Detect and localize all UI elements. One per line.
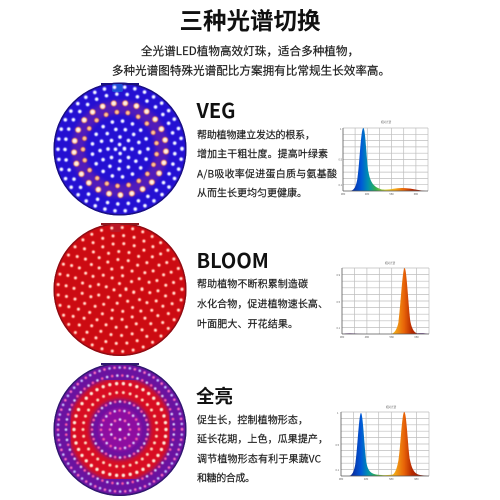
text block: BLOOM description: 叶面肥大、开花结果。 — [197, 316, 298, 330]
panel: VEG lamp disc — [54, 82, 186, 216]
chart: VEG spectrum: 580 — [389, 192, 394, 196]
chart: BLOOM spectrum: 0.1 — [336, 326, 341, 330]
text block: full-on description — [197, 412, 328, 484]
chart: full-on spectrum: 0.5 — [336, 443, 340, 447]
text block: BLOOM description — [197, 276, 328, 330]
chart: VEG spectrum — [338, 120, 428, 196]
chart: full-on spectrum: 380 — [339, 477, 344, 481]
chart: full-on spectrum — [336, 405, 429, 481]
text block: full-on description: 和糖的合成。 — [197, 470, 255, 484]
panel: full-on lamp disc — [54, 363, 186, 496]
chart: VEG spectrum: 0.1 — [338, 183, 343, 187]
chart: VEG spectrum: 480 — [365, 192, 370, 196]
chart: full-on spectrum: 1 — [337, 411, 339, 415]
text block: full-on description: 促生长，控制植物形态， — [197, 412, 308, 426]
chart: VEG spectrum: 相对光谱 — [381, 120, 392, 124]
text block: BLOOM description: 帮助植物不断积累制造碳 — [197, 276, 308, 290]
text block: full-on description: 延长花期，上色，瓜果提产， — [197, 430, 328, 446]
chart: VEG spectrum: 680 — [414, 192, 419, 196]
title: 三种光谱切换 — [180, 2, 321, 36]
chart: BLOOM spectrum: 480 — [365, 335, 370, 339]
chart: VEG spectrum: 380 — [341, 192, 346, 196]
text block: VEG description: A/B吸收率促进蛋白质与氨基酸 — [197, 166, 337, 180]
chart: BLOOM spectrum — [336, 261, 429, 339]
chart: VEG spectrum: 1 — [340, 127, 342, 131]
text block: VEG description — [197, 126, 337, 200]
chart: VEG spectrum: 0.5 — [338, 158, 343, 162]
heading: VEG: VEG — [196, 95, 236, 124]
intro text: 多种光谱图特殊光谱配比方案拥有比常规生长效率高。 — [112, 62, 390, 78]
chart: BLOOM spectrum: 580 — [390, 335, 394, 339]
intro text — [112, 43, 390, 78]
text block: BLOOM description: 水化合物，促进植物速长高、 — [197, 296, 328, 310]
text block: VEG description: 增加主干粗壮度。提高叶绿素 — [197, 146, 328, 160]
chart: full-on spectrum: 580 — [389, 477, 394, 481]
chart: BLOOM spectrum: 680 — [414, 335, 419, 339]
intro text: 全光谱LED植物高效灯珠，适合多种植物， — [141, 43, 359, 59]
chart: full-on spectrum: 0.1 — [336, 468, 340, 472]
heading: 全亮: 全亮 — [196, 383, 233, 409]
chart: full-on spectrum: 相对光谱 — [386, 405, 397, 409]
chart: BLOOM spectrum: 0.5 — [336, 300, 341, 304]
chart: full-on spectrum: 480 — [364, 477, 369, 481]
chart: BLOOM spectrum: 380 — [340, 335, 345, 339]
text block: full-on description: 调节植物形态有利于果蔬VC — [197, 450, 322, 466]
heading: BLOOM: BLOOM — [196, 245, 269, 274]
text block: VEG description: 帮助植物建立发达的根系， — [197, 126, 315, 142]
chart: BLOOM spectrum: 0.9 — [336, 273, 341, 277]
chart: full-on spectrum: 680 — [414, 477, 419, 481]
chart: BLOOM spectrum: 相对光谱 — [385, 261, 396, 265]
panel: BLOOM lamp disc — [54, 223, 186, 356]
text block: VEG description: 从而生长更均匀更健康。 — [197, 184, 307, 200]
